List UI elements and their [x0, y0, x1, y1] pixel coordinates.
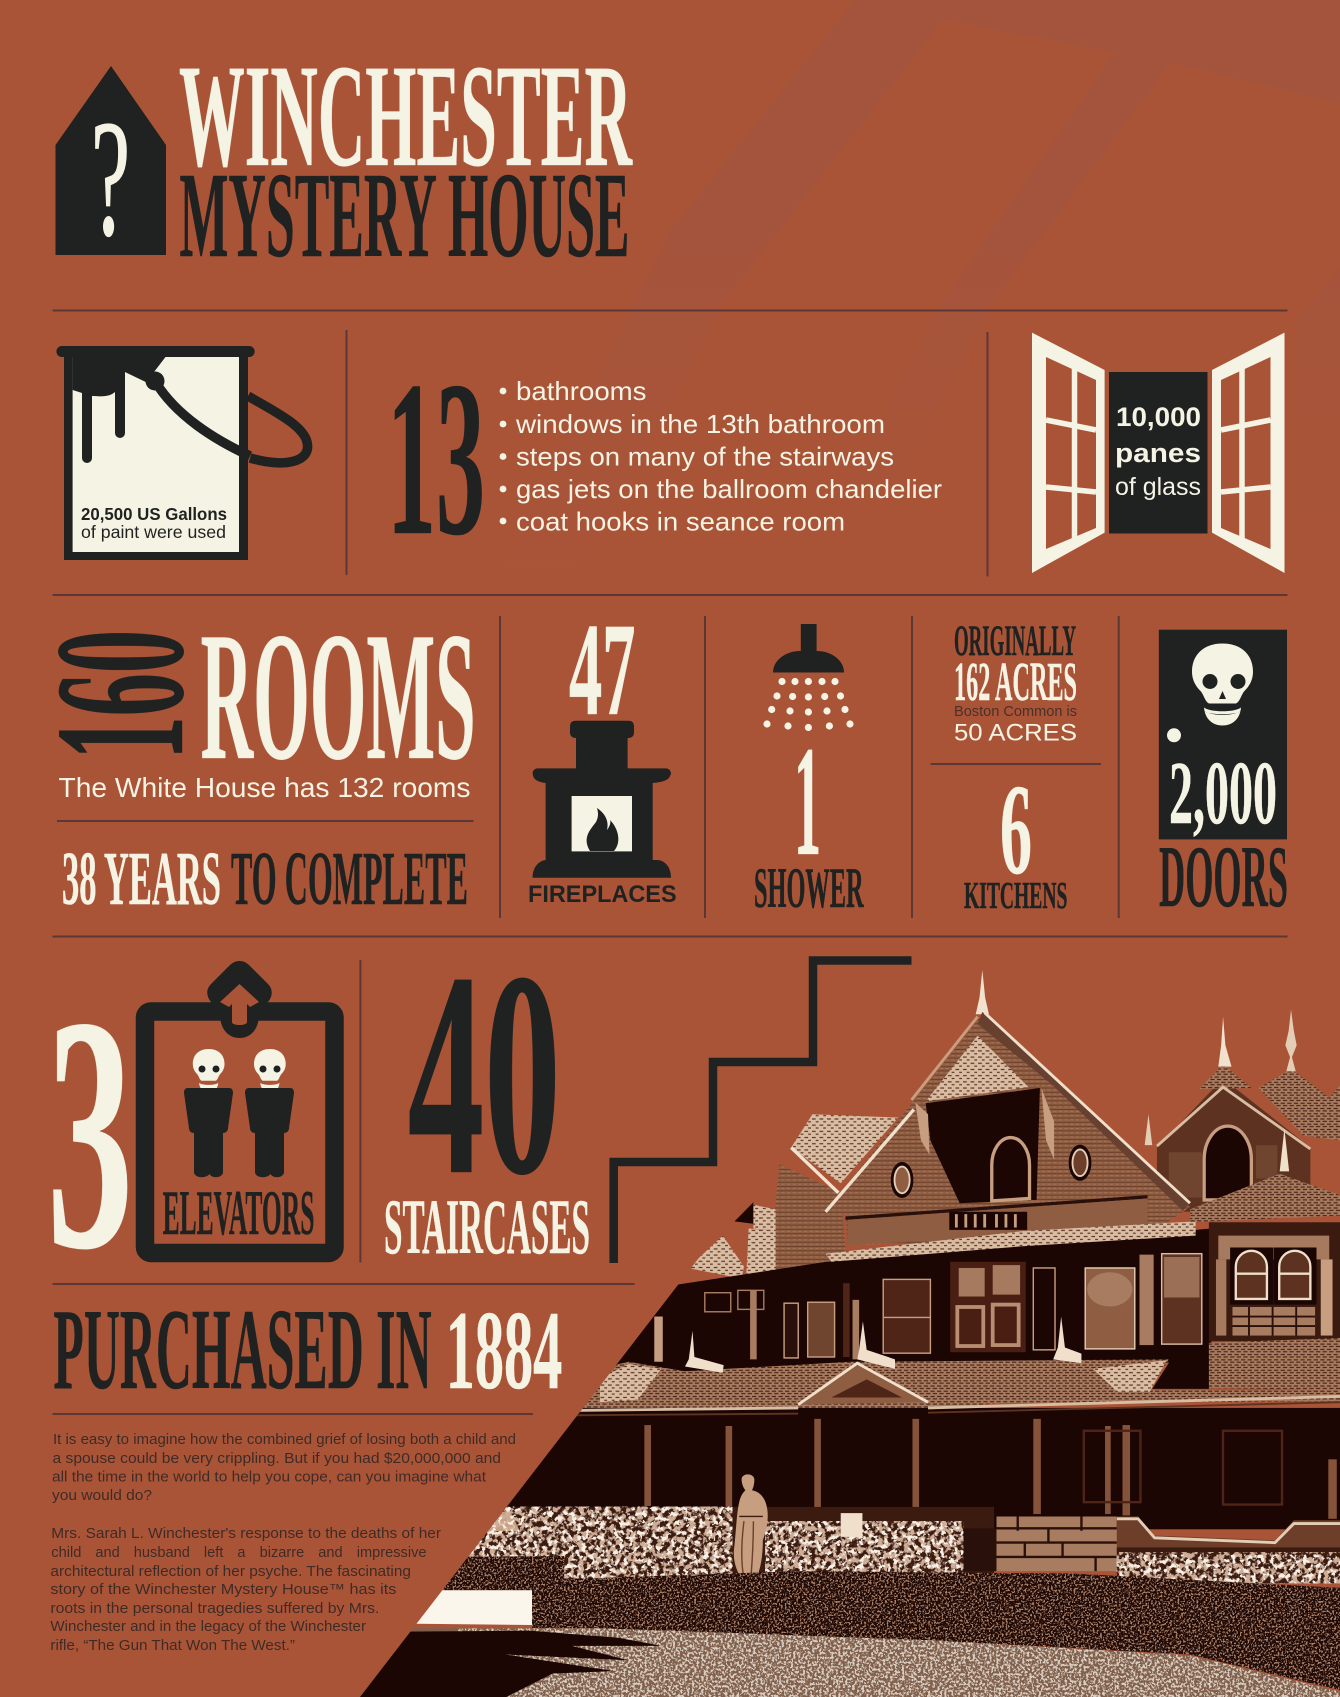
dividers — [52, 310, 1288, 1414]
purchased in 1884: PURCHASED IN — [53, 1286, 432, 1413]
paint caption — [81, 504, 227, 542]
far right turret roofs — [1258, 1069, 1340, 1140]
text: MYSTERY HOUSE — [180, 148, 630, 283]
text: TO COMPLETE — [231, 837, 468, 921]
47 fireplaces: FIREPLACES — [528, 881, 677, 908]
icon: paint bucket — [56, 346, 308, 560]
160 rooms: 160 — [17, 630, 223, 760]
body text paragraph 2: story of the Winchester Mystery House™ has its — [50, 1582, 396, 1598]
6 kitchens: KITCHENS — [964, 875, 1067, 917]
list of 13s: coat hooks in seance room — [516, 506, 845, 536]
body text paragraph 2: architectural reflection of her psyche. The fascinating — [50, 1564, 411, 1580]
icon: fireplace — [533, 721, 671, 878]
lawn — [270, 1628, 1340, 1697]
text: STAIRCASES — [384, 1183, 590, 1270]
main gable — [826, 1014, 1190, 1245]
icon: house with question mark — [56, 66, 166, 270]
icon: open window with 10,000 panes — [1032, 333, 1284, 573]
second floor — [553, 1228, 1211, 1374]
body text paragraph 2: rifle, “The Gun That Won The West.” — [50, 1638, 295, 1654]
body text paragraph 2: roots in the personal tragedies suffered by Mrs. — [50, 1601, 379, 1617]
acres: 50 ACRES — [954, 720, 1077, 747]
title — [179, 34, 633, 283]
6 kitchens — [964, 758, 1067, 917]
body text paragraph 2: Mrs. Sarah L. Winchester's response to the deaths of her — [51, 1526, 441, 1542]
white patch — [416, 1590, 532, 1625]
body text paragraph 1: a spouse could be very crippling. But if you had $20,000,000 and — [52, 1451, 501, 1467]
skeleton figures — [184, 1049, 294, 1177]
160 rooms — [17, 594, 476, 803]
icon: open window with 10,000 panes: of glass — [1115, 473, 1201, 501]
40 staircases — [384, 913, 590, 1270]
stone and garden — [996, 1516, 1117, 1571]
right bay — [1190, 1174, 1340, 1222]
icon: shower head — [763, 624, 854, 731]
body text paragraph 1: you would do? — [52, 1488, 152, 1504]
body text paragraph 1 — [52, 1432, 516, 1504]
body text paragraph 1: all the time in the world to help you cope, can you imagine what — [52, 1470, 486, 1486]
38 years to complete: 38 YEARS — [62, 837, 221, 921]
icon: open window with 10,000 panes: panes — [1115, 438, 1201, 468]
woman — [734, 1474, 768, 1577]
text: ELEVATORS — [163, 1177, 314, 1248]
list of 13s: windows in the 13th bathroom — [515, 409, 885, 439]
text: SHOWER — [754, 857, 864, 920]
text: ROOMS — [201, 594, 476, 798]
icon: elevator — [145, 961, 334, 1253]
6 kitchens: 6 — [1000, 758, 1032, 902]
list of 13s: steps on many of the stairways — [516, 442, 894, 472]
purchased in 1884: 1884 — [446, 1289, 562, 1413]
body text paragraph 2: child and husband left a bizarre and impressive — [51, 1545, 427, 1561]
porch — [490, 1408, 1340, 1530]
acres — [954, 618, 1077, 747]
2,000 doors — [1159, 630, 1288, 926]
left wing — [775, 1164, 846, 1270]
icon: open window with 10,000 panes: 10,000 — [1116, 402, 1201, 432]
160 rooms: The White House has 132 rooms — [58, 772, 471, 803]
list of 13s — [500, 376, 942, 536]
acres: Boston Common is — [954, 704, 1077, 720]
text: WINCHESTER — [179, 34, 633, 197]
1 shower: 1 — [794, 714, 821, 889]
icon: door with skull — [1159, 630, 1287, 839]
list of 13s: bathrooms — [516, 376, 646, 406]
3 elevators — [47, 948, 334, 1319]
icon: house with question mark: ? — [91, 86, 130, 270]
list of 13s: gas jets on the ballroom chandelier — [516, 474, 942, 504]
purchased in 1884 — [53, 1286, 562, 1413]
photo: Winchester house — [270, 970, 1340, 1697]
47 fireplaces — [528, 595, 677, 908]
paint caption: 20,500 US Gallons — [81, 504, 227, 524]
text: ORIGINALLY — [954, 618, 1076, 665]
body text paragraph 1: It is easy to imagine how the combined grief of losing both a child and — [53, 1432, 516, 1448]
lower roof — [543, 1359, 1340, 1414]
text: 13 — [387, 336, 485, 582]
1 shower — [754, 624, 864, 920]
text: 162 ACRES — [954, 651, 1077, 712]
47 fireplaces: 47 — [569, 595, 635, 743]
body text paragraph 2: Winchester and in the legacy of the Winchester — [50, 1619, 366, 1635]
paint caption: of paint were used — [81, 522, 226, 542]
3 elevators: 3 — [47, 948, 133, 1319]
40 staircases: 40 — [408, 913, 561, 1236]
stairs line — [614, 960, 912, 1263]
body text paragraph 2 — [50, 1526, 441, 1654]
hedges — [444, 1556, 1340, 1690]
